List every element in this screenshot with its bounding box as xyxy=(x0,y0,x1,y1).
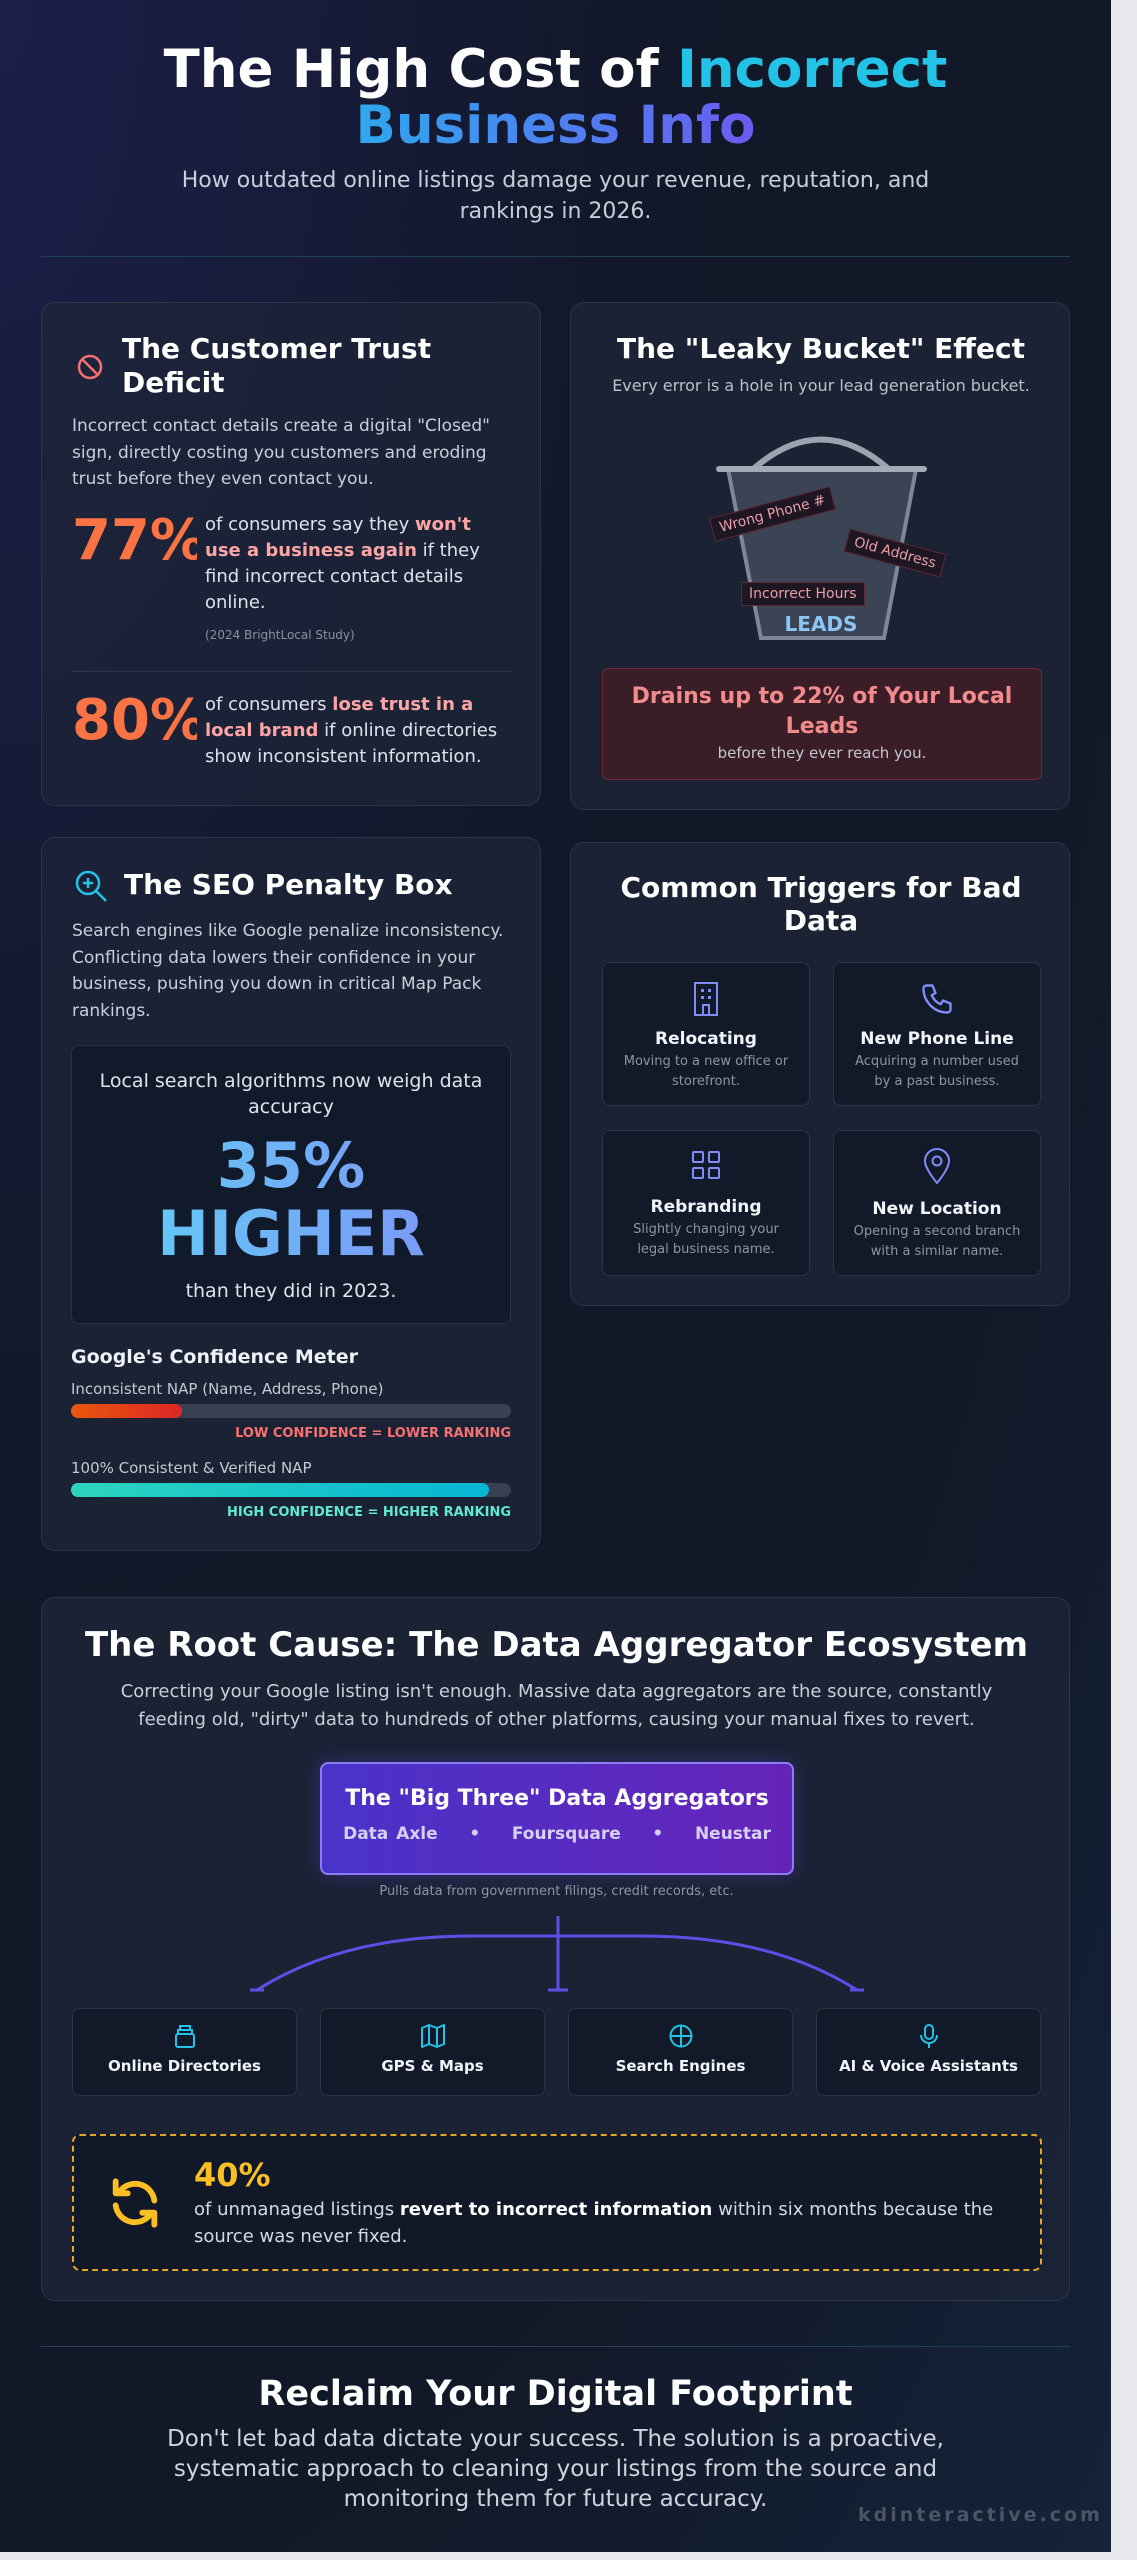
text block: Incorrect contact details create a digital "Closed" sign, directly costing you customers and eroding trust before they even contact you. xyxy=(72,416,490,489)
tile: new phone line xyxy=(833,962,1041,1106)
box: big three aggregators xyxy=(320,1762,794,1875)
stat: 80% xyxy=(72,688,497,767)
tile: new phone line: by a past business. xyxy=(874,1074,1000,1089)
tile: rebranding: Slightly changing your xyxy=(633,1222,779,1237)
text block: Search engines like Google penalize inconsistency. Conflicting data lowers their confidence in your business, pushing you down in critical Map Pack rankings. xyxy=(72,921,503,1020)
icon: refresh xyxy=(112,2178,158,2228)
box: big three aggregators: Data Axle • Foursquare • Neustar xyxy=(343,1824,771,1844)
subtitle: How outdated online listings damage your revenue, reputation, and rankings in 2026. xyxy=(182,168,929,224)
box: big three aggregators: The "Big Three" Data Aggregators xyxy=(345,1786,769,1811)
heading: The Customer Trust Deficit xyxy=(122,332,431,399)
callout: drains 22% xyxy=(602,668,1042,780)
tag: incorrect hours: Incorrect Hours xyxy=(749,586,856,602)
tag: incorrect hours xyxy=(741,582,864,606)
tile: new location: New Location xyxy=(872,1199,1002,1219)
text block: closing: Don't let bad data dictate your success. The solution is a proactive, systematic approach to cleaning your listings from the source and monitoring them for future accuracy. xyxy=(167,2426,944,2512)
tag: old address xyxy=(844,528,946,578)
heading: Data xyxy=(784,904,858,937)
icon: prohibited xyxy=(78,354,102,380)
icon: magnifier xyxy=(76,870,107,902)
title: Business Info xyxy=(356,95,755,156)
tile: rebranding: Rebranding xyxy=(650,1197,762,1217)
callout: 40% revert: 40% xyxy=(194,2156,271,2194)
icon: bucket: LEADS xyxy=(785,612,857,636)
arrow: connector xyxy=(250,1916,864,1992)
tag: old address: Old Address xyxy=(852,534,938,572)
callout: drains 22%: Drains up to 22% of Your Local xyxy=(632,684,1012,709)
tile: rebranding xyxy=(602,1130,810,1276)
chart: confidence meter: Inconsistent NAP (Name, Address, Phone) xyxy=(71,1380,383,1398)
tile: relocating: Moving to a new office or xyxy=(624,1054,788,1069)
tile: ai voice: AI & Voice Assistants xyxy=(839,2057,1018,2075)
panel: root cause: Pulls data from government filings, credit records, etc. xyxy=(379,1884,734,1899)
tag: wrong phone xyxy=(709,486,836,542)
tile: new phone line: Acquiring a number used xyxy=(855,1054,1019,1069)
tile: new location xyxy=(833,1130,1041,1276)
stat: 77%: of consumers say they won't use a business again if they find incorrect contact details online. xyxy=(205,514,480,613)
tile: gps maps xyxy=(320,2008,545,2096)
text block xyxy=(121,1681,992,1730)
tile: new location: Opening a second branch xyxy=(854,1224,1020,1239)
heading: reclaim: Reclaim Your Digital Footprint xyxy=(258,2374,853,2414)
callout: 40% revert: of unmanaged listings revert to incorrect information within six months because the source was never fixed. xyxy=(194,2199,993,2247)
callout: drains 22%: before they ever reach you. xyxy=(718,744,926,762)
tile: relocating: Relocating xyxy=(655,1029,757,1049)
stat box: 35% higher: than they did in 2023. xyxy=(186,1280,396,1302)
tile: online directories xyxy=(72,2008,297,2096)
heading: Common Triggers for Bad xyxy=(620,871,1022,904)
heading xyxy=(620,871,1022,937)
chart: confidence meter: 100% Consistent & Verified NAP xyxy=(71,1459,312,1477)
title: The High Cost of Incorrect xyxy=(164,39,947,100)
panel: common triggers xyxy=(570,842,1070,1306)
heading: The "Leaky Bucket" Effect xyxy=(617,332,1025,365)
stat box: 35% higher: Local search algorithms now weigh data xyxy=(100,1070,482,1092)
stat box: 35% higher: 35% xyxy=(217,1129,365,1202)
tile: ai voice xyxy=(816,2008,1041,2096)
heading: The Root Cause: The Data Aggregator Ecosystem xyxy=(85,1625,1028,1665)
heading: The SEO Penalty Box xyxy=(124,868,453,901)
stat box: 35% higher: HIGHER xyxy=(157,1197,425,1270)
text block: feeding old, "dirty" data to hundreds of other platforms, causing your manual fixes to revert. xyxy=(138,1709,975,1730)
panel: seo penalty box xyxy=(41,837,541,1551)
panel: root cause xyxy=(41,1597,1070,2301)
panel: leaky bucket: Every error is a hole in your lead generation bucket. xyxy=(612,376,1030,395)
icon: bucket xyxy=(716,436,927,640)
tile: new phone line: New Phone Line xyxy=(860,1029,1014,1049)
text block: Correcting your Google listing isn't enough. Massive data aggregators are the source, constantly xyxy=(121,1681,992,1702)
tile: gps maps: GPS & Maps xyxy=(381,2057,484,2075)
tag: wrong phone: Wrong Phone # xyxy=(718,492,827,536)
chart: confidence meter xyxy=(71,1346,511,1520)
tile: new location: with a similar name. xyxy=(871,1244,1003,1259)
tile: rebranding: legal business name. xyxy=(637,1242,775,1257)
chart: confidence meter: HIGH CONFIDENCE = HIGHER RANKING xyxy=(227,1505,511,1520)
title xyxy=(164,39,947,156)
stat box: 35% higher xyxy=(71,1045,511,1324)
panel: customer trust deficit xyxy=(41,302,541,806)
tile: online directories: Online Directories xyxy=(108,2057,261,2075)
stat: 80%: of consumers lose trust in a local brand if online directories show inconsistent information. xyxy=(205,694,497,767)
chart: confidence meter: Google's Confidence Meter xyxy=(71,1346,358,1368)
stat: 77%: (2024 BrightLocal Study) xyxy=(205,628,355,642)
tile: relocating: storefront. xyxy=(672,1074,740,1089)
stat box: 35% higher: accuracy xyxy=(248,1096,334,1118)
tile: search engines: Search Engines xyxy=(616,2057,745,2075)
tile: relocating xyxy=(602,962,810,1106)
chart: confidence meter: LOW CONFIDENCE = LOWER RANKING xyxy=(235,1426,511,1441)
stat: 77% xyxy=(72,508,480,642)
callout: drains 22%: Leads xyxy=(786,714,858,739)
panel: leaky bucket xyxy=(570,302,1070,810)
tile: search engines xyxy=(568,2008,793,2096)
footer brand: kdinteractive.com xyxy=(858,2504,1103,2526)
callout: 40% revert xyxy=(72,2134,1042,2271)
